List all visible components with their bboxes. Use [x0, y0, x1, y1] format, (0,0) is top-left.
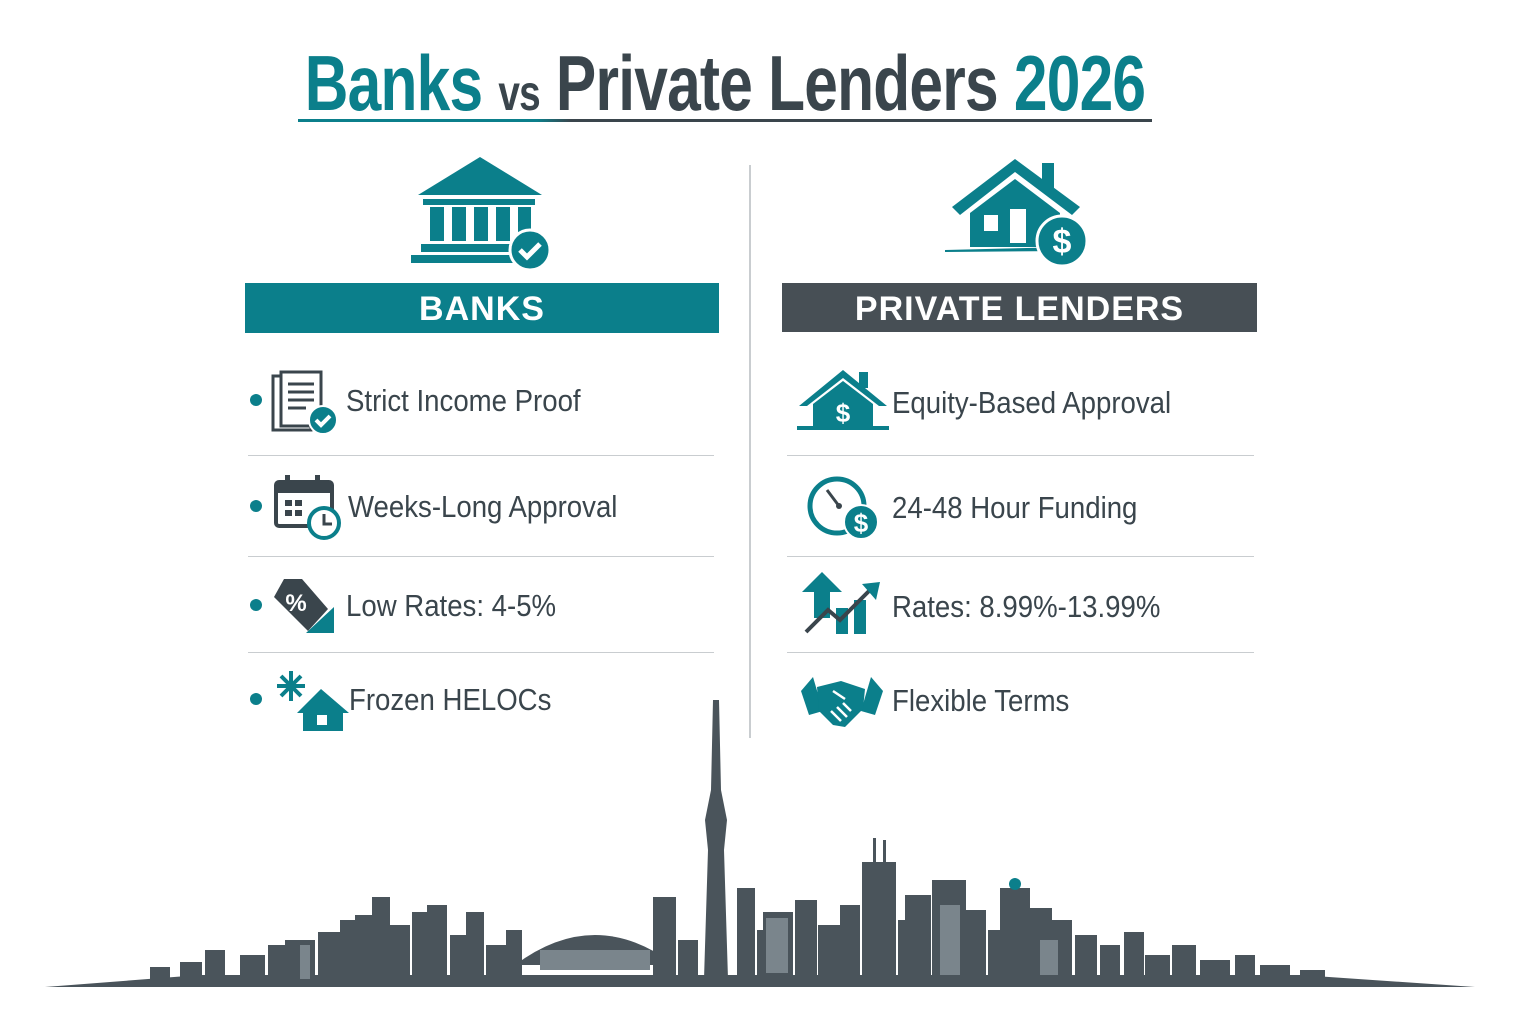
center divider — [749, 165, 751, 738]
bullet row: strict income proof: Strict Income Proof — [346, 383, 581, 418]
row: flexible terms: Flexible Terms — [892, 683, 1069, 718]
row: 24-48 hour funding: 24-48 Hour Funding — [892, 490, 1137, 525]
panel: private lenders list — [787, 370, 1254, 727]
header: banks — [245, 283, 719, 333]
icon: clock dollar — [808, 476, 877, 538]
row: rates — [802, 572, 1160, 634]
title underline — [298, 119, 1152, 122]
bullet row: low rates — [250, 579, 556, 633]
icon: house with dollar: $ — [1053, 223, 1072, 261]
header: private lenders — [782, 283, 1257, 332]
bullet row: weeks-long approval: Weeks-Long Approval — [348, 489, 617, 524]
icon: house with dollar — [945, 159, 1086, 264]
row: flexible terms — [801, 677, 1069, 727]
icon: rising chart — [802, 572, 880, 634]
header: private lenders: PRIVATE LENDERS — [855, 290, 1184, 328]
row: rates: Rates: 8.99%-13.99% — [892, 589, 1160, 624]
header: banks: BANKS — [419, 290, 545, 328]
bullet row: strict income proof — [250, 370, 581, 433]
icon: calendar clock — [274, 475, 341, 540]
bullet row: weeks-long approval — [250, 475, 617, 540]
skyline — [46, 700, 1474, 987]
icon: bank — [411, 157, 548, 268]
panel: banks list — [248, 370, 714, 731]
bullet row: low rates: Low Rates: 4-5% — [346, 588, 556, 623]
icon: handshake — [801, 677, 883, 727]
bullet row: frozen helocs: Frozen HELOCs — [349, 682, 551, 717]
icon: documents check — [272, 370, 336, 433]
title: Banks vs Private Lenders 2026 — [305, 39, 1145, 127]
row: equity-based approval: Equity-Based Approval — [892, 385, 1171, 420]
icon: clock dollar: $ — [854, 508, 869, 538]
icon: house dollar — [797, 370, 889, 430]
row: equity-based approval — [797, 370, 1171, 430]
icon: snowflake house — [277, 671, 349, 731]
icon: percent tag — [274, 579, 334, 633]
icon: house dollar: $ — [836, 398, 851, 428]
bullet row: frozen helocs — [250, 671, 551, 731]
row: 24-48 hour funding — [808, 476, 1137, 538]
icon: percent tag: % — [285, 590, 307, 617]
